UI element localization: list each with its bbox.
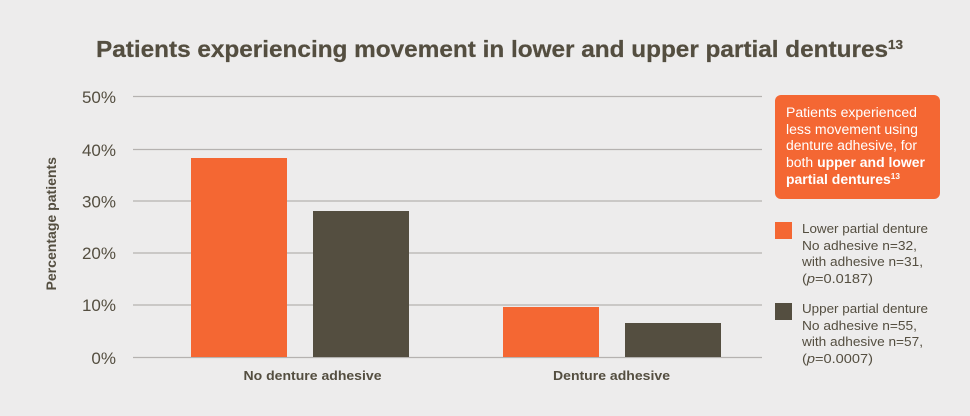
bar: no adhesive, lower partial denture — [191, 158, 287, 357]
bar: adhesive, lower partial denture — [503, 307, 599, 357]
bar: adhesive, upper partial denture — [625, 323, 721, 357]
y-axis labels — [82, 88, 116, 368]
x-axis label: no denture adhesive: No denture adhesive — [244, 368, 382, 383]
y-axis labels: 40% — [82, 141, 116, 160]
title: Patients experiencing movement in lower and upper partial dentures — [96, 36, 861, 62]
x-axis label: denture adhesive: Denture adhesive — [553, 368, 670, 383]
title: 13 — [888, 37, 903, 52]
y-axis title: Percentage patients — [44, 157, 59, 290]
legend: lower partial denture: with adhesive n=31, — [801, 254, 923, 269]
y-axis labels: 0% — [91, 349, 116, 368]
legend: upper partial denture — [775, 301, 928, 366]
legend: lower partial denture: Lower partial denture — [802, 221, 928, 236]
callout: both upper and lower — [786, 155, 926, 170]
legend: lower partial denture: (p=0.0187) — [802, 271, 873, 286]
callout: partial dentures — [786, 172, 887, 187]
legend: upper partial denture: No adhesive n=55, — [802, 318, 917, 333]
bar: no adhesive, upper partial denture — [313, 211, 409, 357]
y-axis labels: 30% — [82, 192, 116, 212]
callout — [775, 95, 940, 199]
legend: lower partial denture: No adhesive n=32, — [802, 238, 917, 253]
y-axis labels: 20% — [82, 244, 116, 263]
bar chart — [44, 88, 762, 383]
callout: Patients experienced — [786, 105, 917, 120]
y-axis labels: 50% — [82, 88, 116, 107]
legend: upper partial denture: (p=0.0007) — [802, 351, 873, 366]
callout: 13 — [891, 172, 901, 181]
legend: upper partial denture: with adhesive n=57, — [801, 334, 923, 349]
legend: upper partial denture: Upper partial denture — [802, 301, 928, 316]
callout: less movement using — [786, 122, 918, 137]
y-axis labels: 10% — [82, 296, 116, 315]
legend: lower partial denture — [775, 221, 928, 286]
callout: denture adhesive, for — [786, 138, 918, 153]
